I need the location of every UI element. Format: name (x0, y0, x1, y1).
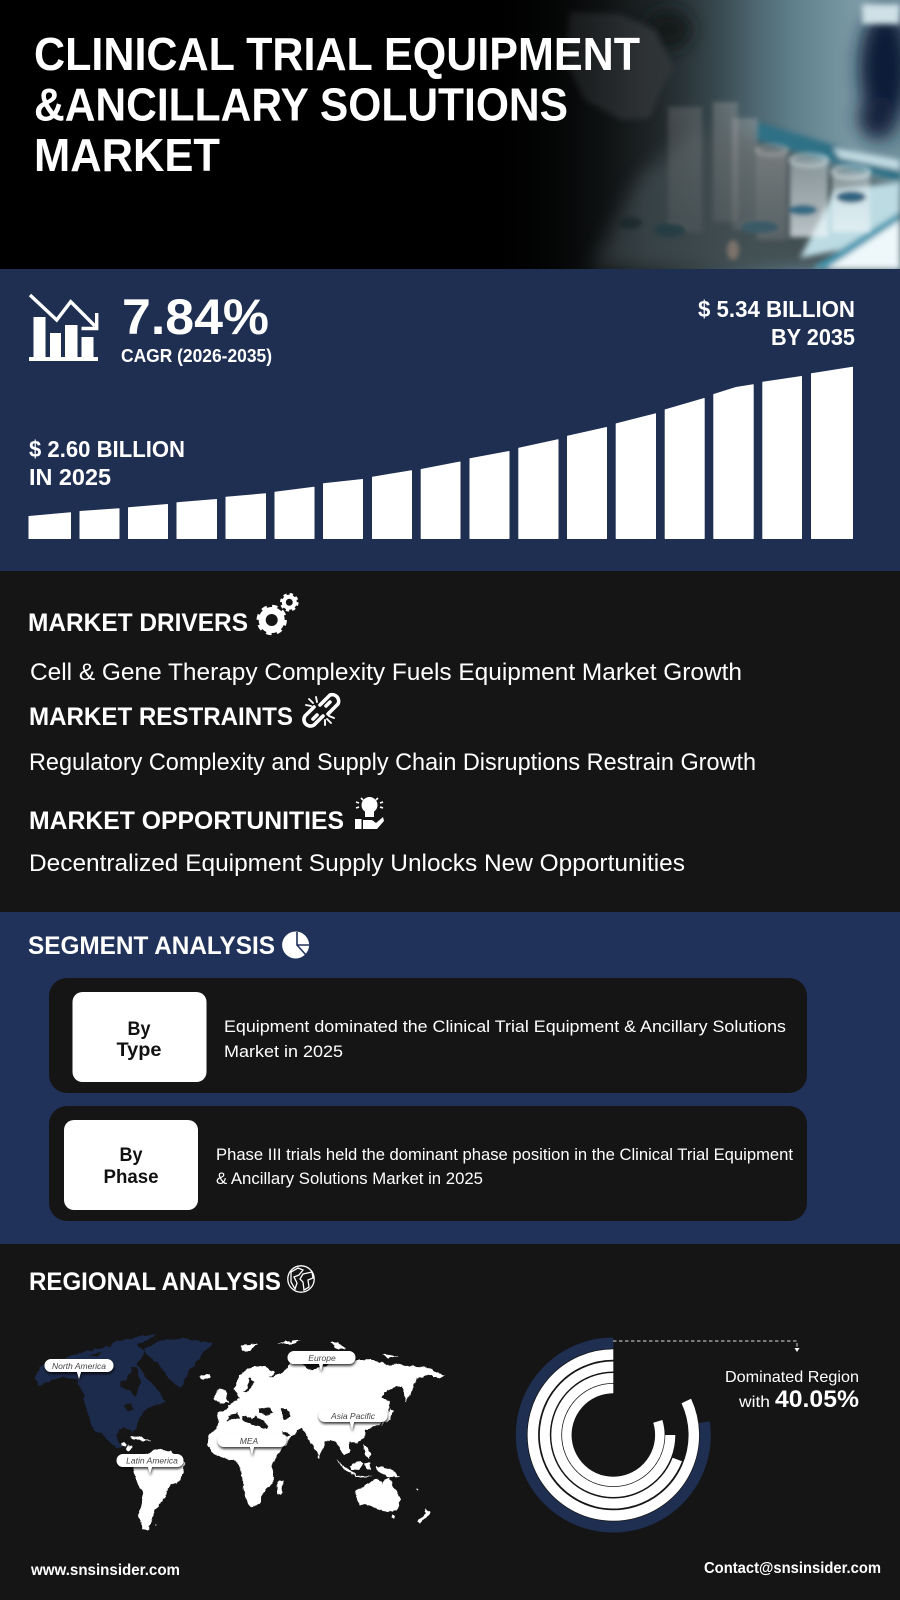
card: by phase (49, 1106, 807, 1221)
panel: market size and CAGR (0, 269, 900, 571)
callout: MEA: MEA (240, 1436, 259, 1446)
card: by type: Equipment dominated the Clinical Trial Equipment & Ancillary Solutions (224, 1017, 786, 1036)
region: North America (dominant) (35, 1333, 213, 1448)
footer: contact email: Contact@snsinsider.com (704, 1560, 881, 1577)
2035 value label (698, 296, 855, 350)
callout: dominated region share: 40.05% (775, 1386, 859, 1413)
CAGR label: CAGR (2026-2035) (121, 345, 272, 366)
icon: chart with arrow (29, 295, 98, 361)
callout: Latin America: Latin America (126, 1456, 178, 1466)
card: by type: By (128, 1018, 151, 1040)
world map (35, 1333, 445, 1530)
callout: dominated region share: Dominated Region (725, 1369, 859, 1386)
card: by phase: By (120, 1144, 143, 1166)
callout: Asia Pacific: Asia Pacific (330, 1411, 376, 1421)
icon: gears (258, 594, 297, 633)
text: opportunities summary: Decentralized Equipment Supply Unlocks New Opportunities (29, 850, 685, 877)
text: drivers summary: Cell & Gene Therapy Complexity Fuels Equipment Market Growth (30, 659, 742, 686)
card: by phase: Phase (104, 1166, 159, 1188)
title: MARKET (34, 129, 220, 181)
title: &ANCILLARY SOLUTIONS (34, 78, 568, 130)
callout: North America (45, 1359, 114, 1379)
icon: globe (288, 1266, 314, 1292)
callout: Latin America (117, 1454, 184, 1474)
callout: MEA (218, 1434, 286, 1455)
callout: dominated region share (725, 1369, 859, 1413)
card: by phase: Phase III trials held the dominant phase position in the Clinical Trial Equipment (216, 1145, 793, 1164)
heading: regional analysis: REGIONAL ANALYSIS (29, 1268, 281, 1296)
card: by phase: & Ancillary Solutions Market in 2025 (216, 1169, 483, 1188)
CAGR value: 7.84% (122, 289, 269, 345)
icon: light bulb over hand (355, 797, 384, 829)
title: CLINICAL TRIAL EQUIPMENT (34, 28, 640, 80)
2025 value label (29, 436, 185, 490)
heading: segment analysis: SEGMENT ANALYSIS (28, 932, 275, 960)
callout: North America: North America (52, 1361, 106, 1371)
heading: market drivers: MARKET DRIVERS (28, 609, 248, 637)
region: South America and Caribbean (121, 1374, 227, 1530)
footer: website: www.snsinsider.com (30, 1562, 180, 1579)
region: Europe, Africa, Asia and Oceania (207, 1341, 445, 1524)
heading: market restraints: MARKET RESTRAINTS (29, 703, 293, 731)
icon: broken chain (304, 695, 339, 726)
2025 value label: IN 2025 (29, 464, 111, 490)
card: by type (49, 978, 807, 1093)
card: by type: Type (116, 1039, 162, 1061)
bar chart: market growth 2025 to 2035 (29, 367, 852, 538)
header banner with laboratory photo (0, 0, 900, 269)
card: by type: Market in 2025 (224, 1042, 343, 1061)
radial bar chart (521, 1343, 705, 1527)
2035 value label: BY 2035 (771, 324, 855, 350)
panel: regional analysis (0, 1244, 900, 1600)
text: restraints summary: Regulatory Complexity and Supply Chain Disruptions Restrain Growth (29, 749, 756, 776)
heading: market opportunities: MARKET OPPORTUNITIES (29, 807, 344, 835)
callout: Asia Pacific (318, 1409, 388, 1430)
2025 value label: $ 2.60 BILLION (29, 436, 185, 462)
callout: Europe: Europe (308, 1353, 336, 1363)
arrow: dashed leader to dominated region (613, 1341, 800, 1352)
callout: Europe (288, 1351, 356, 1371)
callout: dominated region share: with (738, 1394, 770, 1411)
panel: segment analysis (0, 912, 900, 1244)
icon: pie chart (282, 932, 309, 958)
2035 value label: $ 5.34 BILLION (698, 296, 855, 322)
title (34, 28, 640, 181)
panel: market dynamics (0, 571, 900, 912)
